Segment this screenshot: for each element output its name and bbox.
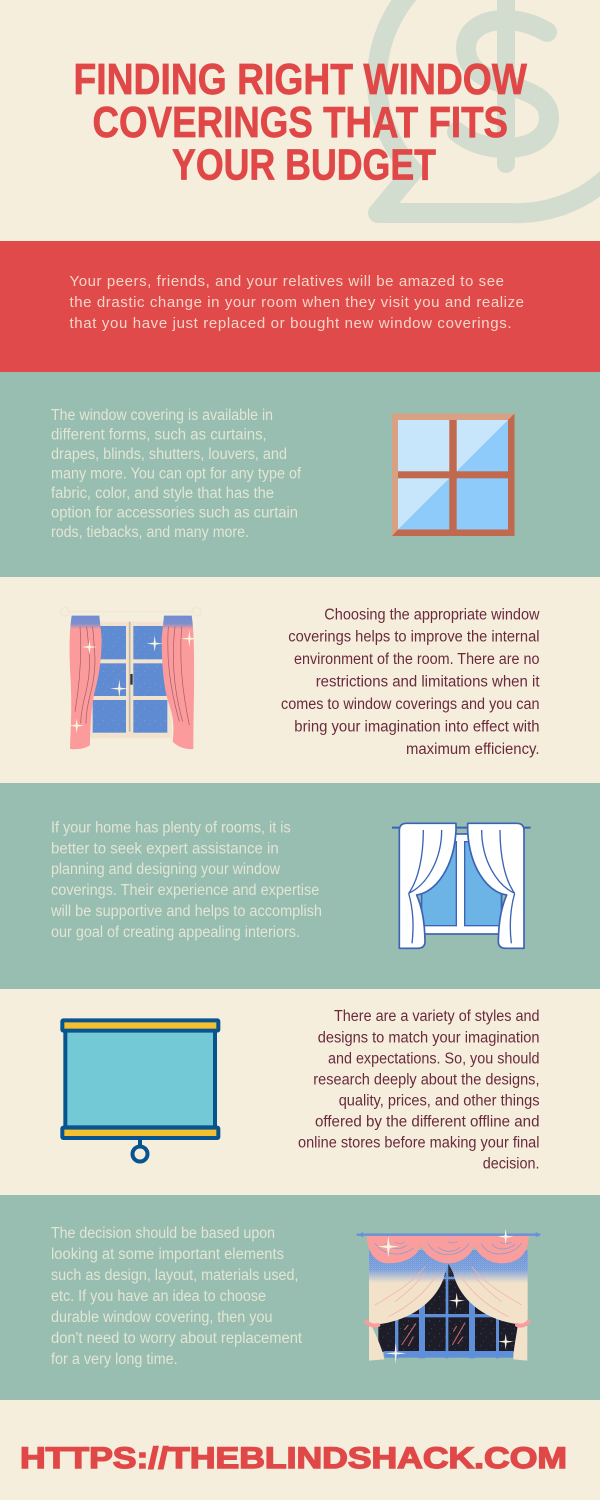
text block: choosing: bring your imagination into effect with <box>294 719 540 736</box>
text block: expert assistance: better to seek expert assistance in <box>51 840 279 857</box>
text block: decision <box>51 1225 303 1368</box>
text block: forms: rods, tiebacks, and many more. <box>51 524 249 541</box>
panel: choosing appropriate coverings <box>0 577 600 783</box>
panel: introduction <box>0 241 600 372</box>
text block: styles <box>298 1008 540 1172</box>
text block: introduction: Your peers, friends, and your relatives will be amazed to see <box>70 273 504 290</box>
title: FINDING RIGHT WINDOW <box>74 56 528 104</box>
icon: dollar coin background <box>377 0 600 213</box>
text block: choosing: comes to window coverings and you can <box>281 696 540 713</box>
text block: expert assistance <box>50 820 322 941</box>
icon: plain window <box>392 414 514 536</box>
text block: forms: option for accessories such as curtain <box>51 505 298 522</box>
text block: forms: drapes, blinds, shutters, louvers, and <box>51 446 287 463</box>
text block: expert assistance: will be supportive and helps to accomplish <box>50 903 322 920</box>
text block: styles: decision. <box>483 1155 540 1172</box>
text block: introduction: the drastic change in your room when they visit you and realize <box>70 294 524 311</box>
text block: styles: quality, prices, and other things <box>339 1092 540 1109</box>
text block: styles: offered by the different offline and <box>315 1113 540 1130</box>
panel: forms of window covering <box>0 372 600 577</box>
website link: HTTPS://THEBLINDSHACK.COM <box>20 1442 567 1475</box>
text block: choosing: Choosing the appropriate window <box>324 606 540 623</box>
text block: choosing <box>281 606 540 758</box>
text block: forms: The window covering is available in <box>51 407 273 424</box>
text block: decision: for a very long time. <box>51 1351 178 1368</box>
panel: styles and designs <box>0 989 600 1195</box>
text block: decision: etc. If you have an idea to choose <box>51 1288 266 1305</box>
icon: valance curtains with night window <box>357 1229 541 1364</box>
text block: expert assistance: planning and designing your window <box>51 861 281 878</box>
text block: expert assistance: coverings. Their experience and expertise <box>51 882 319 899</box>
text block: introduction: that you have just replaced or bought new window coverings. <box>70 315 512 332</box>
title: COVERINGS THAT FITS <box>92 99 508 147</box>
title <box>74 56 528 190</box>
text block: styles: There are a variety of styles and <box>334 1008 540 1025</box>
text block: forms: different forms, such as curtains, <box>51 427 267 444</box>
text block: decision: such as design, layout, materials used, <box>51 1267 298 1284</box>
text block: expert assistance: If your home has plenty of rooms, it is <box>51 820 291 837</box>
text block: forms: fabric, color, and style that has the <box>51 485 274 502</box>
text block: forms <box>51 407 302 541</box>
panel: expert assistance <box>0 783 600 989</box>
text block: choosing: environment of the room. There are no <box>294 651 540 668</box>
panel: footer <box>0 1400 600 1500</box>
text block: decision: durable window covering, then you <box>51 1309 272 1326</box>
text block: styles: online stores before making your final <box>298 1134 540 1151</box>
title: YOUR BUDGET <box>172 142 436 190</box>
text block: styles: and expectations. So, you should <box>328 1050 540 1067</box>
text block: choosing: maximum efficiency. <box>406 741 540 758</box>
text block: choosing: restrictions and limitations when it <box>316 674 540 691</box>
text block: choosing: coverings helps to improve the internal <box>288 629 540 646</box>
text block: forms: many more. You can opt for any type of <box>51 466 302 483</box>
text block: decision: don't need to worry about replacement <box>51 1330 303 1347</box>
icon: roller blind <box>62 1020 218 1161</box>
icon: white curtains with blue window <box>392 823 531 948</box>
panel: header <box>0 0 600 241</box>
text block: introduction <box>70 273 524 332</box>
panel: making the decision <box>0 1195 600 1400</box>
icon: pink curtains with night window <box>61 607 201 749</box>
text block: decision: The decision should be based upon <box>51 1225 275 1242</box>
text block: styles: research deeply about the designs, <box>313 1071 540 1088</box>
text block: styles: designs to match your imagination <box>318 1029 540 1046</box>
text block: expert assistance: our goal of creating appealing interiors. <box>51 924 300 941</box>
text block: decision: looking at some important elements <box>51 1246 284 1263</box>
